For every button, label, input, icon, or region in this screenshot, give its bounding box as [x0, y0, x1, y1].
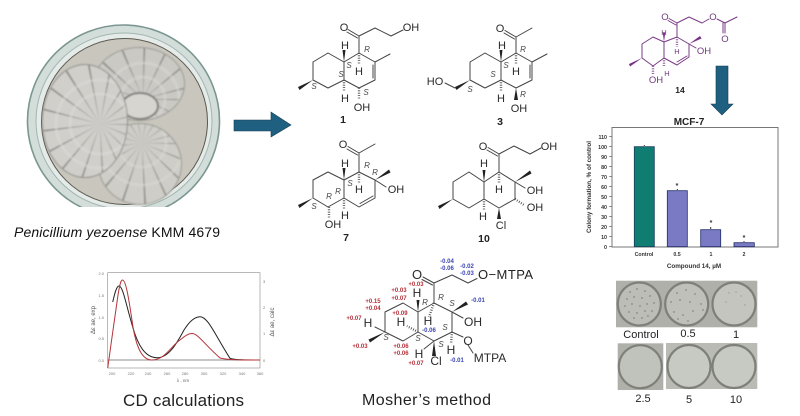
bar chart: MCF-7 colony formation: 20: [601, 225, 607, 231]
compound 7: [298, 139, 404, 244]
compound 3: H: [498, 40, 506, 52]
compound 14 structure: [629, 12, 737, 95]
compound 3: 3: [497, 116, 503, 128]
bar chart: MCF-7 colony formation: *: [743, 235, 746, 242]
bar chart: MCF-7 colony formation: Colony formation, % of control: [586, 141, 593, 233]
Mosher's method structure: -0.01: [450, 358, 464, 364]
compound 14 structure: H: [664, 69, 670, 78]
compound 1: OH: [354, 102, 370, 114]
compound 1: OH: [403, 22, 419, 34]
compound 3: R: [520, 45, 526, 54]
Mosher's method structure: +0.03: [391, 288, 407, 294]
compound 14 structure: H: [661, 28, 667, 37]
Mosher's method structure: +0.07: [408, 361, 424, 367]
plate label: 1: [733, 329, 739, 341]
Mosher's method structure: +0.03: [408, 282, 424, 288]
compound 1: [298, 22, 419, 126]
compound 7: H: [341, 210, 349, 222]
CD spectra chart: 1: [263, 331, 266, 336]
Mosher's method structure: H: [413, 286, 421, 300]
Mosher's method structure: H: [364, 316, 372, 330]
compound 3: S: [503, 61, 509, 70]
compound 3: OH: [511, 103, 527, 115]
compound 14 structure: O: [721, 34, 729, 45]
compound 7: OH: [388, 184, 404, 196]
compound 10: 10: [478, 233, 490, 245]
Mosher's method structure: S: [442, 323, 448, 332]
Mosher's method structure: S: [415, 334, 421, 343]
compound 1: S: [311, 82, 317, 91]
Mosher's method structure: H: [415, 347, 423, 361]
bar chart: MCF-7 colony formation: 1: [710, 252, 713, 258]
compound 10: OH: [527, 202, 543, 214]
CD spectra chart: 340: [239, 371, 246, 376]
CD spectra chart: 200: [109, 371, 116, 376]
Mosher's method structure: S: [438, 340, 444, 349]
Mosher's method structure: -0.02: [460, 264, 474, 270]
bar chart: MCF-7 colony formation: 70: [601, 175, 607, 181]
colony plates: bottom row: [618, 343, 757, 406]
chart title: MCF-7: [674, 117, 705, 128]
Mosher's method structure: +0.06: [393, 344, 409, 350]
compound 7: OH: [325, 219, 341, 231]
plate label: 5: [686, 394, 692, 406]
compound 7: S: [347, 179, 353, 188]
caption: fungus name: Penicillium yezoense KMM 4679: [14, 224, 220, 240]
bar chart: MCF-7 colony formation: *: [710, 220, 713, 227]
CD spectra chart: 1.0: [98, 315, 105, 320]
caption: Mosher's method: Mosher’s method: [362, 392, 491, 409]
Mosher's method structure: -0.06: [422, 328, 436, 334]
bar chart: MCF-7 colony formation: 90: [601, 155, 607, 161]
colony plates: top row: [616, 281, 757, 341]
bar chart: MCF-7 colony formation: 30: [601, 215, 607, 221]
bar chart: MCF-7 colony formation: Control: [635, 252, 654, 258]
CD spectra chart: 0.0: [98, 358, 105, 363]
compound 1: H: [341, 93, 349, 105]
compound 10: H: [495, 184, 503, 196]
compound 10: Cl: [496, 220, 506, 232]
compound 7: R: [372, 168, 378, 177]
photo: petri dish with fungal colonies: [28, 25, 220, 217]
compound 10: H: [479, 211, 487, 223]
CD spectra chart: λ , nm: [177, 378, 189, 383]
plate label: 2.5: [635, 393, 651, 405]
Mosher's method structure: +0.06: [393, 351, 409, 357]
Mosher's method structure: S: [449, 299, 455, 308]
compound 7: R: [364, 161, 370, 170]
plate label: 0.5: [680, 328, 696, 340]
CD spectra chart: 320: [220, 371, 227, 376]
compound 3: R: [520, 90, 526, 99]
compound 7: O: [339, 139, 348, 151]
Mosher's method structure: H: [424, 314, 432, 328]
compound 14 structure: O: [661, 12, 669, 23]
compound 14 structure: O: [709, 12, 717, 23]
CD spectra chart: 2.0: [98, 271, 105, 276]
compound 1: O: [340, 22, 349, 34]
Mosher's method structure: O: [463, 334, 473, 348]
compound 10: H: [480, 158, 488, 170]
Mosher's method structure: O−MTPA: [478, 267, 533, 282]
compound 1: S: [346, 61, 352, 70]
CD spectra chart: 1.5: [98, 293, 105, 298]
arrow: to bioassay: [711, 66, 733, 115]
compound 10: OH: [527, 185, 543, 197]
Mosher's method structure: O: [412, 267, 422, 282]
Mosher's method structure: -0.01: [471, 298, 485, 304]
Mosher's method structure: [346, 259, 533, 368]
arrow: to compounds: [234, 112, 291, 137]
CD spectra chart: Δε ae, exp: [91, 305, 97, 334]
bar chart: MCF-7 colony formation: 60: [601, 185, 607, 191]
compound 7: R: [326, 192, 332, 201]
CD spectra chart: 220: [128, 371, 135, 376]
Mosher's method structure: -0.04: [440, 259, 454, 265]
CD spectra chart: 240: [145, 371, 152, 376]
CD spectra chart: 2: [263, 305, 266, 310]
compound 3: HO: [427, 76, 444, 88]
compound 14 structure: H: [674, 47, 680, 56]
compound 1: R: [364, 45, 370, 54]
bar chart: MCF-7 colony formation: 0.5: [673, 252, 681, 258]
compound 10: OH: [541, 141, 557, 153]
bar chart: MCF-7 colony formation: [586, 117, 778, 270]
bar chart: MCF-7 colony formation: 40: [601, 205, 607, 211]
compound 14 structure: OH: [697, 46, 711, 57]
Mosher's method structure: S: [383, 333, 389, 342]
compound 1: S: [363, 88, 369, 97]
CD spectra chart: Δε ae, calc: [270, 307, 276, 337]
bar chart: MCF-7 colony formation: 100: [598, 145, 607, 151]
compound 7: S: [311, 202, 317, 211]
Mosher's method structure: +0.04: [365, 306, 381, 312]
compound 14 structure: 14: [675, 85, 685, 95]
bar chart: MCF-7 colony formation: 10: [601, 235, 607, 241]
Mosher's method structure: R: [438, 293, 444, 302]
CD spectra chart: 0.5: [98, 336, 105, 341]
CD spectra chart: [91, 271, 276, 383]
Mosher's method structure: +0.03: [352, 344, 368, 350]
Mosher's method structure: +0.09: [392, 311, 408, 317]
Mosher's method structure: H: [447, 343, 455, 357]
Mosher's method structure: OH: [464, 315, 482, 329]
compound 3: O: [496, 23, 505, 35]
Mosher's method structure: R: [422, 298, 428, 307]
compound 10: O: [479, 141, 488, 153]
Mosher's method structure: +0.07: [391, 296, 407, 302]
CD spectra chart: 280: [182, 371, 189, 376]
compound 3: S: [490, 70, 496, 79]
compound 3: H: [497, 93, 505, 105]
Mosher's method structure: -0.06: [440, 266, 454, 272]
CD spectra chart: 3: [263, 279, 266, 284]
compound 3: [427, 23, 547, 128]
compound 14 structure: OH: [649, 75, 663, 86]
compound 1: H: [355, 66, 363, 78]
compound 1: H: [341, 40, 349, 52]
CD spectra chart: 0: [263, 358, 266, 363]
CD spectra chart: 260: [164, 371, 171, 376]
Mosher's method structure: -0.03: [460, 271, 474, 277]
compound 3: H: [512, 66, 520, 78]
compound 10: [438, 141, 557, 245]
bar chart: MCF-7 colony formation: 50: [601, 195, 607, 201]
bar chart: MCF-7 colony formation: 80: [601, 165, 607, 171]
compound 1: S: [338, 70, 344, 79]
compound 7: 7: [343, 232, 349, 244]
compound 1: 1: [340, 114, 346, 126]
caption: CD calculations: CD calculations: [123, 391, 244, 410]
Mosher's method structure: +0.15: [365, 299, 381, 305]
compound 3: S: [467, 85, 473, 94]
bar chart: MCF-7 colony formation: Compound 14, µM: [667, 263, 721, 270]
bar chart: MCF-7 colony formation: *: [676, 183, 679, 190]
bar chart: MCF-7 colony formation: 2: [743, 252, 746, 258]
CD spectra chart: 300: [201, 371, 208, 376]
CD spectra chart: 360: [257, 371, 264, 376]
Mosher's method structure: MTPA: [474, 351, 506, 365]
compound 7: H: [341, 158, 349, 170]
plate label: 10: [730, 394, 742, 406]
compound 7: H: [355, 184, 363, 196]
Mosher's method structure: +0.07: [346, 316, 362, 322]
bar chart: MCF-7 colony formation: 110: [598, 135, 607, 141]
plate label: Control: [623, 329, 659, 341]
Mosher's method structure: H: [397, 315, 405, 329]
bar chart: MCF-7 colony formation: 0: [604, 245, 607, 251]
compound 7: R: [335, 187, 341, 196]
Mosher's method structure: Cl: [430, 354, 442, 368]
